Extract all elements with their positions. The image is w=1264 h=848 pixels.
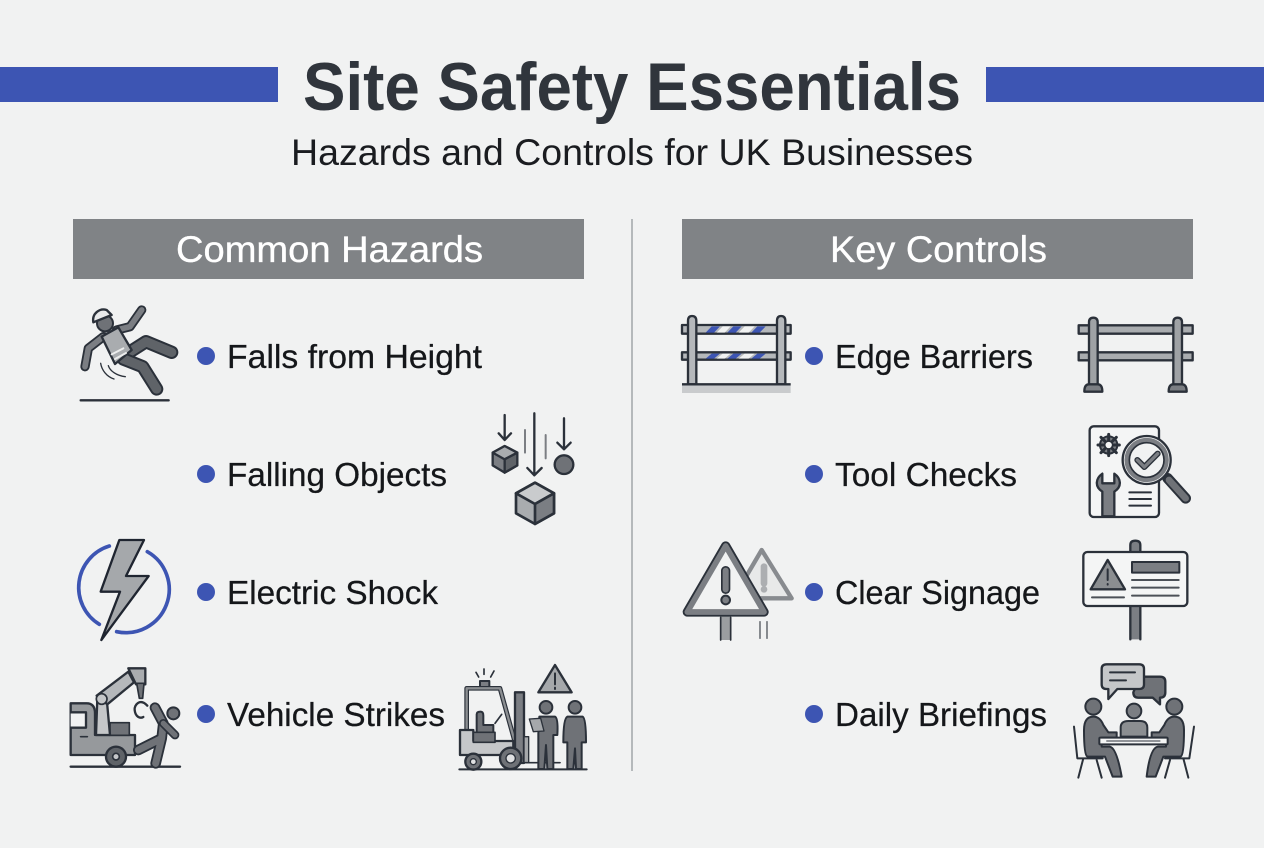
panel: common hazards bbox=[71, 219, 587, 770]
left title bar bbox=[0, 67, 278, 102]
center divider bbox=[631, 219, 633, 771]
icon: electric bolt bbox=[79, 540, 169, 640]
icon: tool inspection checklist bbox=[1090, 426, 1186, 517]
right title bar bbox=[986, 67, 1264, 102]
icon: striped edge barrier bbox=[682, 316, 791, 393]
icon: team briefing bbox=[1074, 664, 1194, 778]
item: tool checks: Tool Checks bbox=[835, 456, 1017, 493]
icon: forklift and workers bbox=[459, 665, 587, 770]
icon: falling objects bbox=[493, 413, 573, 524]
heading: key controls bbox=[682, 219, 1193, 279]
item: falls from height: Falls from Height bbox=[227, 338, 482, 375]
heading: key controls: Key Controls bbox=[830, 229, 1047, 270]
panel: key controls bbox=[682, 219, 1194, 778]
heading: common hazards: Common Hazards bbox=[176, 229, 483, 270]
icon: falling worker bbox=[81, 309, 172, 400]
item: vehicle strikes: Vehicle Strikes bbox=[227, 696, 445, 733]
item: edge barriers: Edge Barriers bbox=[835, 338, 1033, 375]
icon: plain edge barrier bbox=[1079, 318, 1193, 392]
title: Site Safety Essentials bbox=[303, 49, 961, 125]
item: falling objects: Falling Objects bbox=[227, 456, 447, 493]
icon: information sign board bbox=[1083, 541, 1187, 639]
icon: crane truck striking person bbox=[71, 668, 180, 767]
item: daily briefings: Daily Briefings bbox=[835, 696, 1047, 733]
item: clear signage: Clear Signage bbox=[835, 574, 1040, 611]
heading: common hazards bbox=[73, 219, 584, 279]
item: electric shock: Electric Shock bbox=[227, 574, 438, 611]
subtitle: Hazards and Controls for UK Businesses bbox=[291, 132, 973, 173]
icon: warning triangles bbox=[687, 546, 792, 640]
